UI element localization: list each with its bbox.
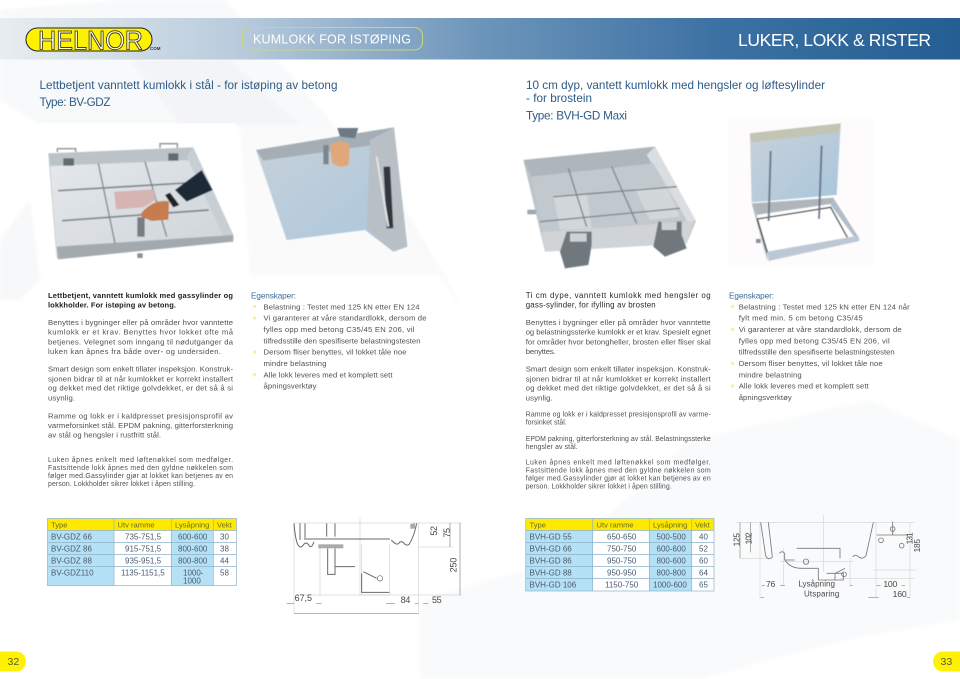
table: BV-GDZ sizes: 800-800 [178,556,208,566]
heading: right product [526,79,825,122]
table: BV-GDZ sizes: 1000- [183,568,204,578]
table: BVH-GD sizes: Lysåpning [653,520,687,530]
table: BV-GDZ sizes: 1000 [183,576,201,586]
list: right properties: Egenskaper: [729,292,774,300]
table: BV-GDZ sizes: 915-751,5 [125,544,162,554]
diagram: BV-GDZ section with dimensions: 250 [449,558,459,572]
table: BV-GDZ sizes: 58 [220,568,229,578]
text: right description: Smart design som enkelt tillater inspeksjon. Konstruk- [526,365,711,374]
table: BVH-GD sizes: 52 [699,544,708,554]
table: BVH-GD sizes: 40 [699,532,708,542]
text: left description: Smart design som enkelt tillater inspeksjon. Konstruk- [48,365,233,374]
list: left properties: Egenskaper: [251,292,296,300]
text: left description: Luken åpnes enkelt med løftenøkkel som medfølger. [48,456,233,464]
list: right properties: Belastning : Testet med 125 kN etter EN 124 når [739,302,910,311]
list: left properties [251,292,426,391]
list: left properties: Alle lokk leveres med et komplett sett [264,370,393,379]
table: BV-GDZ sizes: 44 [220,556,229,566]
table: BV-GDZ sizes: 935-951,5 [125,556,162,566]
diagram: BVH-GD section with dimensions: 160 [893,589,907,599]
page number 33 [933,652,960,672]
text: left description: kumlokk er et krav. Benyttes hvor lokket ofte må [48,328,234,337]
page number 32 [0,652,26,672]
logo: Helnor: COM [150,46,161,51]
text: right description [526,291,712,491]
list: right properties: fylt med min. 5 cm betong C35/45 [739,314,863,323]
list: right properties: fylles opp med betong C35/45 EN 206, vil [739,336,890,345]
text: right description: forsinket stål. [526,419,567,427]
text: left description: av stål og hengsler i rustfritt stål. [48,431,161,440]
text: right description: for områder hvor betongheller, brosten eller fliser skal [526,337,711,346]
table: BV-GDZ sizes: 1135-1151,5 [121,568,165,578]
table: BVH-GD sizes: BVH-GD 86 [530,556,572,566]
heading: right product: 10 cm dyp, vantett kumlokk med hengsler og løftesylinder [526,79,825,92]
table: BV-GDZ sizes: Type [51,520,67,530]
text: left description [48,291,234,488]
list: left properties: mindre belastning [264,359,326,368]
table: BV-GDZ sizes: 38 [220,544,229,554]
text: right description: benyttes. [526,347,556,356]
text: left description: Lettbetjent, vanntett kumlokk med gassylinder og [48,291,233,300]
list: left properties: åpningsverktøy [264,382,317,391]
text: left description: person. Lokkholder sikrer lokket i åpen stilling. [48,480,195,488]
page section title: LUKER, LOKK & RISTER [738,30,931,50]
diagram: BV-GDZ section with dimensions: 67,5 [295,593,312,603]
text: left description: følger med.Gassylinder gjør at lokket kan betjenes av en [48,473,233,480]
diagram: BV-GDZ section with dimensions: 52 [429,526,439,536]
table: BV-GDZ sizes: 800-600 [178,544,208,554]
table: BVH-GD sizes: 600-600 [656,544,686,554]
table: BVH-GD sizes: 60 [699,556,708,566]
list: left properties: tilfredsstille den spesifiserte belastningstesten [264,336,420,345]
table: BVH-GD sizes: BVH-GD 66 [530,544,572,554]
heading: right product: - for brostein [526,92,592,105]
heading: left product: Lettbetjent vanntett kumlokk i stål - for istøping av betong [40,79,338,92]
list: right properties: Alle lokk leveres med et komplett sett [739,382,870,391]
table: BVH-GD sizes: 64 [699,568,708,578]
text: left description: betjenes. Velegnet som inngang til nødutganger da [48,337,234,346]
table: BV-GDZ sizes: 30 [220,532,229,542]
list: right properties: mindre belastning [739,370,802,379]
text: right description: og dekket med det riktige golvdekket, er det så å si [526,384,711,393]
text: right description: EPDM pakning, gitterforsterkning av stål. Belastningssterke [526,435,711,443]
diagram: BV-GDZ section with dimensions: 55 [432,595,442,605]
list: right properties: tilfredsstille den spesifiserte belastningstesten [739,348,895,357]
diagram: BV-GDZ section with dimensions: 84 [401,595,410,605]
table: BVH-GD sizes: Vekt [695,520,711,530]
header band [0,18,960,60]
diagram: BVH-GD section with dimensions: 102 [743,532,753,544]
diagram: BVH-GD section with dimensions: 76 [766,579,776,589]
table: BVH-GD sizes: 650-650 [607,532,637,542]
table: BVH-GD sizes [526,518,714,591]
text: right description: Benyttes i bygninger eller på områder hvor vanntette [526,318,711,327]
list: right properties: åpningsverktøy [739,393,792,402]
diagram: BVH-GD section with dimensions: 100 [883,579,898,589]
photo: open hatch [728,119,873,265]
diagram: BVH-GD section with dimensions: 185 [912,539,922,552]
diagram: BVH-GD section with dimensions: 131 [905,532,915,544]
diagram: BVH-GD section with dimensions [732,515,922,599]
table: BV-GDZ sizes: BV-GDZ 66 [51,532,92,542]
text: right description: sjonen bidrar til at når kumlokket er korrekt installert [526,374,712,383]
table: BV-GDZ sizes: Vekt [217,520,233,530]
diagram: BVH-GD section with dimensions: Lysåpning [798,579,835,588]
text: right description: følger med.Gassylinder gjør at lokket kan betjenes av en [526,476,711,483]
table: BV-GDZ sizes: Lysåpning [175,520,209,530]
table: BVH-GD sizes: 500-500 [656,532,686,542]
list: right properties: Dersom fliser benyttes, vil lokket tåle noe [739,359,883,368]
section label pill: KUMLOKK FOR ISTØPING [253,32,411,46]
table: BV-GDZ sizes [48,518,236,586]
text: left description: og dekket med det riktige golvdekket, er det så å si [48,384,233,393]
text: left description: Benyttes i bygninger eller på områder hvor vanntette [48,318,233,327]
table: BVH-GD sizes: Type [530,520,546,530]
text: right description: person. Lokkholder sikrer lokket i åpen stilling. [526,483,672,491]
table: BVH-GD sizes: 65 [699,580,708,590]
text: left description: lokkholder. For istøping av betong. [48,300,176,310]
table: BVH-GD sizes: 1150-750 [605,580,639,590]
section label pill [242,28,422,50]
list: left properties: Belastning : Testet med 125 kN etter EN 124 [264,302,420,311]
page number 33: 33 [940,656,952,668]
table: BV-GDZ sizes: 735-751,5 [125,532,162,542]
photo: deep tray with hinges [523,147,696,268]
text: right description: usynlig. [526,393,553,402]
table: BVH-GD sizes: 950-750 [607,556,637,566]
table: BVH-GD sizes: BVH-GD 88 [530,568,572,578]
text: right description: Luken åpnes enkelt med løftenøkkel som medfølger. [526,459,711,467]
diagram: BVH-GD section with dimensions: Utsparing [804,589,839,598]
text: right description: og belastningssterke kumlokk er et krav. Spesielt egnet [526,328,712,337]
text: left description: luken kan åpnes fra både over- og undersiden. [48,347,221,356]
table: BV-GDZ sizes: BV-GDZ110 [51,568,94,578]
table: BVH-GD sizes: 800-600 [656,556,686,566]
heading: left product: Type: BV-GDZ [40,96,110,109]
text: right description: Ramme og lokk er i kaldpresset presisjonsprofil av varme- [526,412,711,419]
table: BVH-GD sizes: 950-950 [607,568,637,578]
list: left properties: fylles opp med betong C35/45 EN 206, vil [264,325,415,334]
list: right properties: Vi garanterer at våre standardlokk, dersom de [739,325,902,334]
diagram: BV-GDZ section with dimensions: 75 [442,528,452,538]
table: BV-GDZ sizes: 600-600 [178,532,208,542]
text: right description: hengsler av stål. [526,443,578,451]
list: left properties: Vi garanterer at våre standardlokk, dersom de [264,314,426,323]
table: BVH-GD sizes: 1000-600 [653,580,687,590]
heading: left product [40,79,338,109]
list: right properties [729,292,910,402]
photo: lid seen from below [256,127,407,252]
diagram: BV-GDZ section with dimensions [287,518,462,614]
table: BVH-GD sizes: BVH-GD 55 [530,532,572,542]
table: BV-GDZ sizes: BV-GDZ 86 [51,544,92,554]
logo: Helnor: HELNOR [38,26,143,56]
heading: right product: Type: BVH-GD Maxi [526,110,627,122]
list: left properties: Dersom fliser benyttes, vil lokket tåle noe [264,348,406,357]
text: left description: Ramme og lokk er i kaldpresset presisjonsprofil av [48,411,233,420]
table: BV-GDZ sizes: BV-GDZ 88 [51,556,92,566]
table: BVH-GD sizes: Utv ramme [596,520,634,530]
table: BV-GDZ sizes: Utv ramme [118,520,155,530]
text: left description: usynlig. [48,393,75,402]
text: right description: Ti cm dype, vanntett kumlokk med hengsler og [526,291,711,300]
table: BVH-GD sizes: BVH-GD 106 [530,580,577,590]
text: left description: sjonen bidrar til at når kumlokket er korrekt installert [48,374,234,383]
text: right description: gass-sylinder, for ifylling av brosten [526,300,656,310]
page number 32: 32 [8,656,19,668]
text: left description: varmeforsinket stål. EPDM pakning, gitterforsterkning [48,421,233,430]
table: BVH-GD sizes: 800-800 [656,568,686,578]
text: right description: Fastsittende lokk åpnes med den gyldne nøkkelen som [526,467,711,475]
diagram: BVH-GD section with dimensions: 125 [732,533,742,546]
text: left description: Fastsittende lokk åpnes med den gyldne nøkkelen som [48,464,233,472]
table: BVH-GD sizes: 750-750 [607,544,637,554]
photo: tray with hand [39,123,236,272]
